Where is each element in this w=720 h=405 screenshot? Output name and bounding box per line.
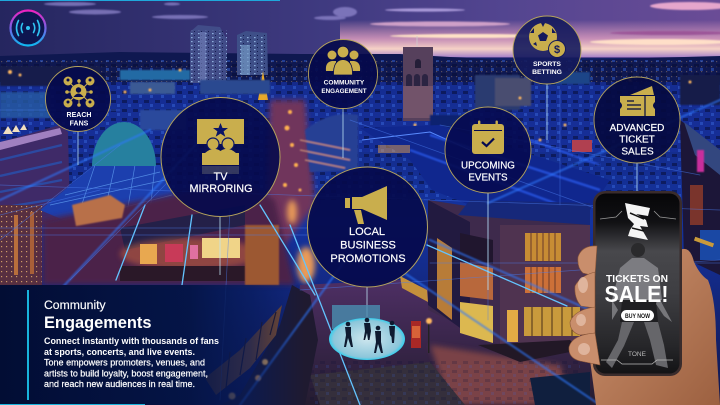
- circle: sports betting: [513, 16, 581, 84]
- top accent line: [0, 0, 280, 1]
- far skyline: [0, 52, 720, 85]
- icon: ball and coin: $: [554, 44, 560, 56]
- church tower: [403, 36, 433, 121]
- label: PROMOTIONS: [330, 253, 406, 265]
- circle: local business promotions: [308, 167, 428, 287]
- circle: community engagement: [308, 40, 378, 108]
- tree lights: [287, 200, 315, 283]
- boats bottom right: [530, 372, 590, 405]
- mid city texture: [0, 60, 720, 200]
- poster headline: TICKETS ON: [606, 273, 668, 285]
- phone: SALE!: [604, 281, 668, 307]
- glass roof grid: [40, 165, 175, 240]
- central plaza shops: [42, 180, 295, 285]
- label: SALES: [621, 146, 654, 158]
- phone: [593, 191, 682, 376]
- bottom accent line: [0, 404, 145, 405]
- warm street: [265, 100, 315, 245]
- heading: Engagements: [44, 314, 151, 332]
- text panel: [0, 285, 305, 405]
- red phone box: [411, 318, 432, 353]
- buy now button: BUY NOW: [625, 314, 650, 320]
- teal dome: [92, 122, 156, 166]
- brick office building: [400, 200, 590, 362]
- logo: broadcast icon: [10, 10, 46, 46]
- icon: network of people: [64, 76, 94, 108]
- glass balcony lower left: [205, 285, 318, 405]
- tone logo: TONE: [628, 351, 647, 358]
- body text: Connect instantly with thousands of fans: [44, 336, 219, 346]
- icon: ticket: [620, 86, 655, 116]
- icon: tv and viewers: [197, 119, 244, 174]
- sticker logo: [625, 203, 650, 240]
- label: UPCOMING: [461, 160, 515, 172]
- body text: artists to build loyalty, boost engagement,: [44, 368, 208, 378]
- label: EVENTS: [468, 172, 508, 184]
- ground plaza: [290, 280, 620, 405]
- player silhouette: [606, 243, 672, 368]
- label: TICKET: [619, 134, 655, 146]
- body text: at sports, concerts, and live events.: [44, 347, 195, 357]
- subtitle: Community: [44, 298, 107, 312]
- accent bar: [27, 290, 29, 400]
- circle: upcoming events: [445, 107, 531, 193]
- body text: [44, 336, 219, 389]
- bright blue rooftops right of centre: [360, 125, 610, 210]
- curved right building: [300, 114, 358, 172]
- hand holding phone: [569, 191, 720, 405]
- label: ENGAGEMENT: [321, 88, 367, 95]
- icon: calendar with check: [472, 120, 504, 154]
- blue light rays: [0, 90, 720, 405]
- gold spire: [258, 71, 268, 100]
- label: BUSINESS: [340, 240, 396, 252]
- fingers: [569, 246, 600, 365]
- connector pins: [78, 84, 637, 330]
- label: BETTING: [532, 69, 562, 76]
- twin towers: [190, 25, 268, 83]
- mid-city buildings: [0, 66, 720, 135]
- circle: reach fans: [46, 66, 110, 132]
- body text: Tone empowers promoters, venues, and: [44, 358, 205, 368]
- left old buildings: [0, 124, 80, 285]
- label: LOCAL: [349, 226, 385, 238]
- icon: group of people: [326, 46, 360, 75]
- label: FANS: [70, 120, 89, 128]
- circle: advanced ticket sales: [594, 77, 680, 163]
- spotlight with people: [329, 305, 405, 360]
- icon: megaphone: [345, 186, 387, 224]
- label: REACH: [67, 112, 91, 119]
- scattered city lights: [8, 68, 692, 142]
- buy now button: [621, 310, 654, 321]
- sky: [0, 0, 720, 58]
- label: MIRRORING: [190, 183, 252, 195]
- right side buildings: [680, 120, 720, 275]
- circle: tv mirroring: [161, 98, 280, 216]
- palm: [590, 249, 720, 405]
- body text: and reach new audiences in real time.: [44, 379, 195, 389]
- label: ADVANCED: [610, 123, 664, 134]
- label: SPORTS: [533, 61, 561, 68]
- fingernails: [576, 277, 590, 355]
- label: TV: [214, 171, 228, 183]
- label: COMMUNITY: [324, 80, 365, 86]
